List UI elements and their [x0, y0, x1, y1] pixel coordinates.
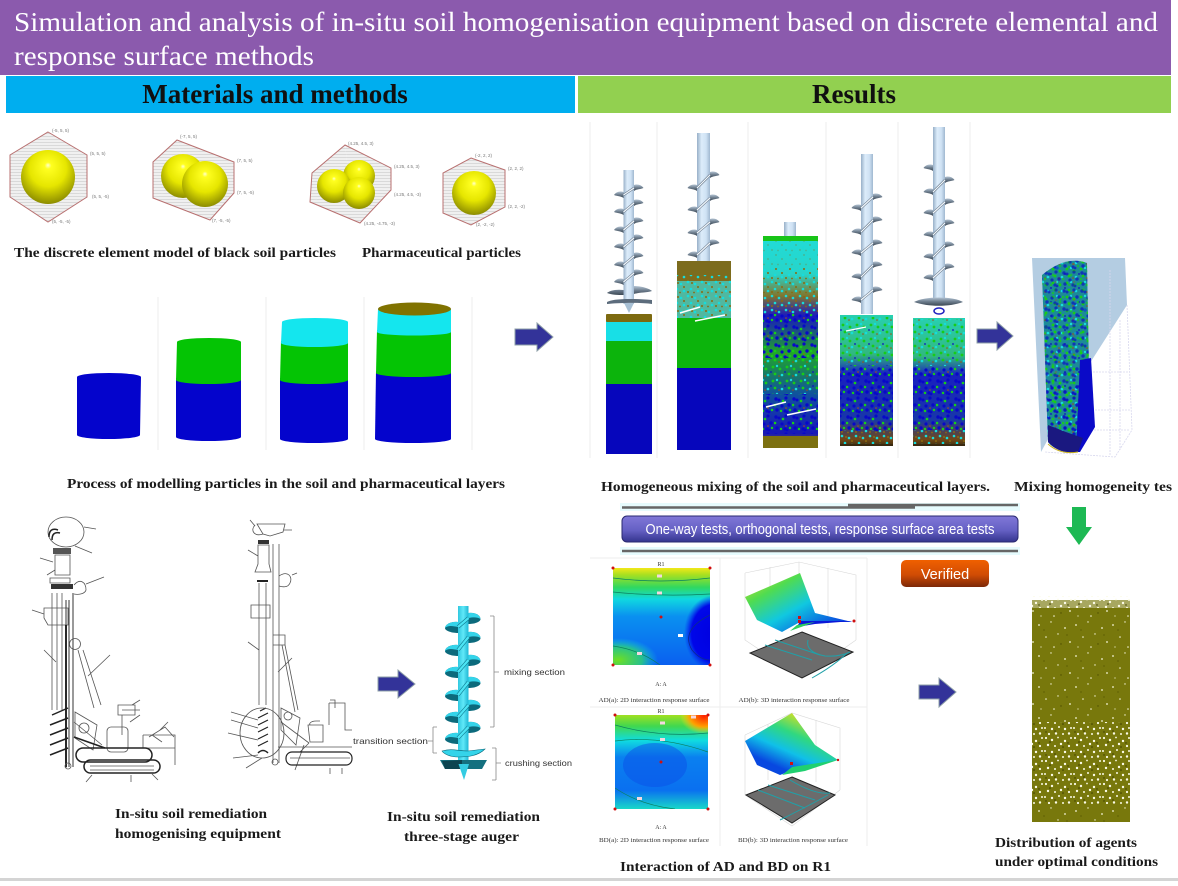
banner: test methods — [620, 503, 1020, 555]
chart: BD 2D contour: R1 — [657, 709, 665, 715]
caption: three-stage auger — [387, 810, 540, 845]
stage 5: auger withdrawn — [913, 127, 965, 446]
chart: BD 3D surface: BD(b): 3D interaction response surface — [738, 837, 848, 844]
cylinder: three layers — [280, 318, 348, 443]
caption: interaction of AD and BD: Interaction of AD and BD on R1 — [620, 860, 831, 875]
panel: homogeneous mixing simulation stages — [590, 122, 970, 458]
stage 1: auger above layers — [606, 170, 652, 454]
arrow: down to optimal conditions — [1066, 507, 1092, 545]
cylinder: two layers — [176, 338, 241, 441]
panel: pharmaceutical particle model, small sphere: (-2, 2, 2) — [475, 153, 493, 158]
caption: distribution of agents: under optimal conditions — [995, 855, 1159, 870]
arrow: surfaces to agent distribution — [919, 678, 956, 707]
panel: black soil particle model, double sphere: (-7, 5, 5) — [180, 134, 198, 139]
panel: black soil particle model, double sphere — [153, 134, 255, 223]
banner: test methods: One-way tests, orthogonal tests, response surface area tests — [646, 522, 994, 538]
panel: response surface plots — [578, 558, 867, 846]
label: mixing section: mixing section — [504, 667, 565, 677]
panel: black soil particle model, double sphere: (7, 5, 5) — [237, 158, 253, 163]
caption: homogenising equipment — [115, 807, 281, 842]
chart: BD 3D surface — [738, 713, 848, 844]
stage 3: auger fully inserted — [763, 222, 818, 448]
panel: pharmaceutical particle model, small sphere: (2, -2, -2) — [476, 222, 495, 227]
panel: pharmaceutical particle model, small sphere — [443, 153, 526, 227]
panel: pharmaceutical particle model, small sphere: (2, 2, 2) — [508, 166, 524, 171]
panel: pharmaceutical particle model, triple sphere: (4.25, -4.75, -3) — [364, 221, 396, 226]
caption: distribution of agents: Distribution of agents — [995, 836, 1138, 851]
panel: agent distribution — [1032, 596, 1130, 822]
arrow: equipment to auger — [378, 670, 415, 698]
chart: AD 3D surface: AD(b): 3D interaction response surface — [738, 697, 850, 704]
panel: pharmaceutical particle model, triple sphere: (4.25, 4.5, 3) — [348, 141, 374, 146]
arrow: mixing to homogeneity test — [977, 322, 1013, 350]
caption: process of modelling: Process of modelling particles in the soil and pharmaceutical layers — [67, 477, 506, 492]
title banner: response surface methods — [14, 41, 314, 71]
panel: layered particle cylinders — [77, 297, 472, 450]
chart: AD 2D contour: R1 — [657, 562, 665, 568]
heading: materials and methods: Materials and methods — [142, 79, 408, 109]
heading: results: Results — [812, 79, 896, 109]
title banner — [0, 0, 1171, 75]
label: crushing section: crushing section — [505, 758, 572, 768]
caption: homogeneous mixing: Homogeneous mixing of the soil and pharmaceutical layers. — [601, 480, 990, 495]
panel: black soil particle model, single sphere: (5, -5, -5) — [52, 219, 71, 224]
title banner: Simulation and analysis of in-situ soil homogenisation equipment based on discrete elemental and — [14, 7, 1159, 37]
panel: pharmaceutical particle model, triple sphere — [310, 141, 422, 226]
stage 4: auger withdrawing — [840, 154, 893, 446]
cylinder: four layers — [375, 302, 451, 443]
caption: distribution of agents — [995, 836, 1159, 870]
diagram: homogenising equipment, isometric view — [32, 517, 175, 782]
diagram: homogenising equipment, side view — [228, 520, 352, 774]
caption: three-stage auger: In-situ soil remediation — [387, 810, 540, 825]
chart: BD 2D contour — [599, 709, 710, 844]
caption: black soil particles: The discrete element model of black soil particles — [14, 246, 337, 261]
panel: black soil particle model, single sphere: (5, 5, 5) — [90, 151, 106, 156]
arrow: layers to mixing — [515, 323, 553, 351]
panel: mixing homogeneity test section — [1032, 258, 1132, 457]
panel: black soil particle model, single sphere: (-5, 5, 5) — [52, 128, 70, 133]
chart: AD 3D surface — [738, 562, 856, 704]
stage 2: auger entering — [677, 133, 731, 450]
panel: black soil particle model, double sphere: (7, 5, -5) — [237, 190, 255, 195]
badge: verified — [901, 560, 989, 587]
caption: pharmaceutical particles: Pharmaceutical particles — [362, 246, 522, 261]
chart: BD 2D contour: BD(a): 2D interaction response surface — [599, 837, 709, 844]
heading: materials and methods — [6, 76, 575, 113]
chart: BD 2D contour: A: A — [655, 825, 667, 831]
panel: black soil particle model, double sphere: (7, -5, -5) — [212, 218, 231, 223]
panel: black soil particle model, single sphere — [10, 128, 110, 224]
panel: black soil particle model, single sphere: (5, 5, -5) — [92, 194, 110, 199]
panel: pharmaceutical particle model, small sphere: (2, 2, -2) — [508, 204, 526, 209]
heading: results — [578, 76, 1171, 113]
chart: AD 2D contour — [598, 562, 712, 704]
chart: AD 2D contour: A: A — [655, 682, 667, 688]
label: transition section: transition section — [353, 736, 428, 746]
caption: mixing homogeneity test: Mixing homogeneity tes — [1014, 480, 1173, 495]
caption: homogenising equipment: homogenising equipment — [115, 827, 281, 842]
caption: homogenising equipment: In-situ soil remediation — [115, 807, 267, 822]
chart: AD 2D contour: AD(a): 2D interaction response surface — [598, 697, 710, 704]
cylinder: one layer — [77, 373, 141, 439]
diagram: three-stage auger — [353, 606, 572, 780]
panel: pharmaceutical particle model, triple sphere: (4.25, 4.5, -3) — [394, 192, 422, 197]
panel: pharmaceutical particle model, triple sphere: (4.25, 4.5, 3) — [394, 164, 420, 169]
caption: three-stage auger: three-stage auger — [404, 830, 519, 845]
badge: verified: Verified — [921, 567, 969, 583]
